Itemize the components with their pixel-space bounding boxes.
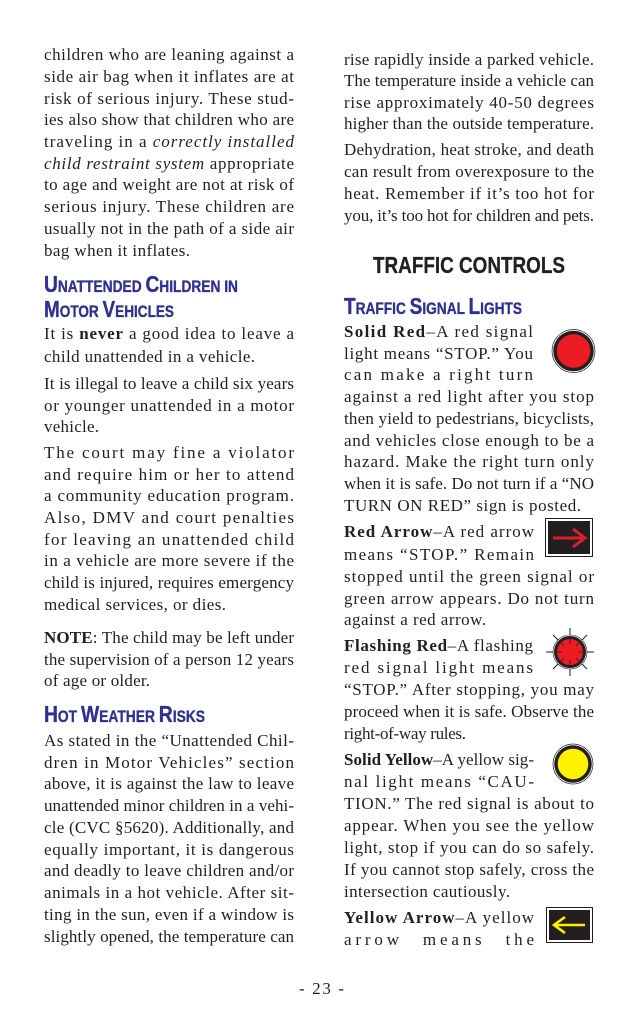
- text block: side air bag continuation: ies also show that children who are: [44, 110, 294, 129]
- text block: temperature continuation: higher than the outside temperature.: [344, 114, 594, 133]
- text block: hot weather risks: above, it is against the law to leave: [44, 774, 294, 793]
- text block: side air bag continuation: usually not in the path of a side air: [44, 219, 294, 238]
- icon: solid yellow light: [553, 744, 593, 784]
- text block: flashing red: “STOP.” After stopping, you may: [344, 680, 594, 699]
- text block: solid yellow: Solid Yellow–A yellow sig-: [344, 750, 534, 769]
- text block: side air bag continuation: to age and weight are not at risk of: [44, 175, 294, 194]
- text block: solid yellow: TION.” The red signal is about to: [344, 794, 594, 813]
- text block: unattended children: or younger unattended in a motor: [44, 396, 294, 415]
- note: the supervision of a person 12 years: [44, 650, 294, 669]
- text block: solid red: then yield to pedestrians, bicyclists,: [344, 409, 594, 428]
- text block: side air bag continuation: child restraint system appropriate: [44, 154, 294, 173]
- text block: temperature continuation: can result from overexposure to the: [344, 162, 594, 181]
- text block: red arrow: green arrow appears. Do not turn: [344, 589, 594, 608]
- text block: solid yellow: light, stop if you can do so safely.: [344, 838, 594, 857]
- text block: solid yellow: If you cannot stop safely, cross the: [344, 860, 594, 879]
- section title: traffic controls: TRAFFIC CONTROLS: [373, 252, 565, 278]
- text block: hot weather risks: ting in the sun, even if a window is: [44, 905, 294, 924]
- text block: solid red: hazard. Make the right turn only: [344, 452, 594, 471]
- text block: flashing red: Flashing Red–A flashing: [344, 636, 534, 655]
- text block: hot weather risks: As stated in the “Unattended Chil-: [44, 731, 294, 750]
- text block: side air bag continuation: risk of serious injury. These stud-: [44, 89, 294, 108]
- note: [44, 628, 294, 690]
- text block: temperature continuation: rise rapidly inside a parked vehicle.: [344, 50, 594, 69]
- text block: temperature continuation: heat. Remember if it’s too hot for: [344, 184, 594, 203]
- note: of age or older.: [44, 671, 150, 690]
- heading: unattended children in motor vehicles: UNATTENDED CHILDREN IN: [44, 271, 238, 297]
- icon: solid red light: [552, 330, 595, 372]
- text block: yellow arrow: arrow means the: [344, 930, 534, 949]
- text block: unattended children: [44, 324, 294, 614]
- text block: solid red: TURN ON RED” sign is posted.: [344, 496, 581, 515]
- text block: solid red: Solid Red–A red signal: [344, 322, 533, 341]
- text block: unattended children: Also, DMV and court penalties: [44, 508, 294, 527]
- text block: solid red: when it is safe. Do not turn if a “NO: [344, 474, 594, 493]
- text block: unattended children: The court may fine a violator: [44, 443, 294, 462]
- text block: unattended children: medical services, or dies.: [44, 595, 226, 614]
- icon: flashing red light: [546, 628, 594, 676]
- text block: solid red: light means “STOP.” You: [344, 344, 534, 363]
- text block: hot weather risks: dren in Motor Vehicles” section: [44, 753, 294, 772]
- text block: yellow arrow: Yellow Arrow–A yellow: [344, 908, 535, 927]
- text block: hot weather risks: and deadly to leave children and/or: [44, 861, 294, 880]
- text block: flashing red: [344, 636, 594, 743]
- text block: unattended children: child is injured, requires emergency: [44, 573, 294, 592]
- text block: solid yellow: nal light means “CAU-: [344, 772, 534, 791]
- text block: hot weather risks: [44, 731, 294, 946]
- text block: hot weather risks: animals in a hot vehicle. After sit-: [44, 883, 294, 902]
- text block: side air bag continuation: serious injury. These children are: [44, 197, 294, 216]
- text block: flashing red: proceed when it is safe. Observe the: [344, 702, 594, 721]
- text block: solid yellow: [344, 750, 595, 901]
- text block: red arrow: [344, 522, 594, 629]
- text block: solid red: and vehicles close enough to be a: [344, 431, 594, 450]
- text block: red arrow: against a red arrow.: [344, 610, 486, 629]
- text block: solid red: against a red light after you stop: [344, 387, 594, 406]
- text block: unattended children: a community education program.: [44, 486, 294, 505]
- heading: traffic signal lights: TRAFFIC SIGNAL LIGHTS: [344, 293, 522, 319]
- text block: red arrow: means “STOP.” Remain: [344, 545, 534, 564]
- text block: side air bag continuation: [44, 45, 294, 260]
- text block: unattended children: It is never a good idea to leave a: [44, 324, 294, 343]
- icon: red arrow signal: [546, 518, 592, 556]
- text block: flashing red: red signal light means: [344, 658, 533, 677]
- text block: side air bag continuation: children who are leaning against a: [44, 45, 294, 64]
- text block: unattended children: and require him or her to attend: [44, 465, 294, 484]
- text block: temperature continuation: The temperature inside a vehicle can: [344, 71, 594, 90]
- text block: hot weather risks: cle (CVC §5620). Additionally, and: [44, 818, 294, 837]
- page number: - 23 -: [299, 979, 344, 998]
- heading: hot weather risks: HOT WEATHER RISKS: [44, 701, 205, 727]
- text block: solid red: [344, 322, 594, 515]
- text block: solid red: can make a right turn: [344, 365, 534, 384]
- text block: temperature continuation: rise approximately 40-50 degrees: [344, 93, 594, 112]
- text block: red arrow: stopped until the green signal or: [344, 567, 594, 586]
- text block: hot weather risks: equally important, it is dangerous: [44, 840, 294, 859]
- text block: solid yellow: appear. When you see the yellow: [344, 816, 595, 835]
- text block: temperature continuation: [344, 50, 594, 225]
- text block: hot weather risks: slightly opened, the temperature can: [44, 927, 294, 946]
- text block: unattended children: in a vehicle are more severe if the: [44, 551, 294, 570]
- text block: side air bag continuation: bag when it inflates.: [44, 241, 190, 260]
- text block: temperature continuation: you, it’s too hot for children and pets.: [344, 206, 594, 225]
- text block: unattended children: for leaving an unattended child: [44, 530, 294, 549]
- note: NOTE: The child may be left under: [44, 628, 294, 647]
- text block: hot weather risks: unattended minor children in a vehi-: [44, 796, 294, 815]
- text block: red arrow: Red Arrow–A red arrow: [344, 522, 535, 541]
- text block: solid yellow: intersection cautiously.: [344, 882, 510, 901]
- text block: temperature continuation: Dehydration, heat stroke, and death: [344, 140, 594, 159]
- text block: side air bag continuation: side air bag when it inflates are at: [44, 67, 294, 86]
- heading: unattended children in motor vehicles: MOTOR VEHICLES: [44, 296, 174, 322]
- text block: unattended children: vehicle.: [44, 417, 99, 436]
- text block: unattended children: child unattended in a vehicle.: [44, 347, 255, 366]
- text block: side air bag continuation: traveling in a correctly installed: [44, 132, 294, 151]
- text block: unattended children: It is illegal to leave a child six years: [44, 374, 294, 393]
- heading: unattended children in motor vehicles: [44, 271, 238, 322]
- text block: flashing red: right-of-way rules.: [344, 724, 466, 743]
- icon: yellow arrow signal: [546, 908, 592, 942]
- text block: yellow arrow: [344, 908, 535, 949]
